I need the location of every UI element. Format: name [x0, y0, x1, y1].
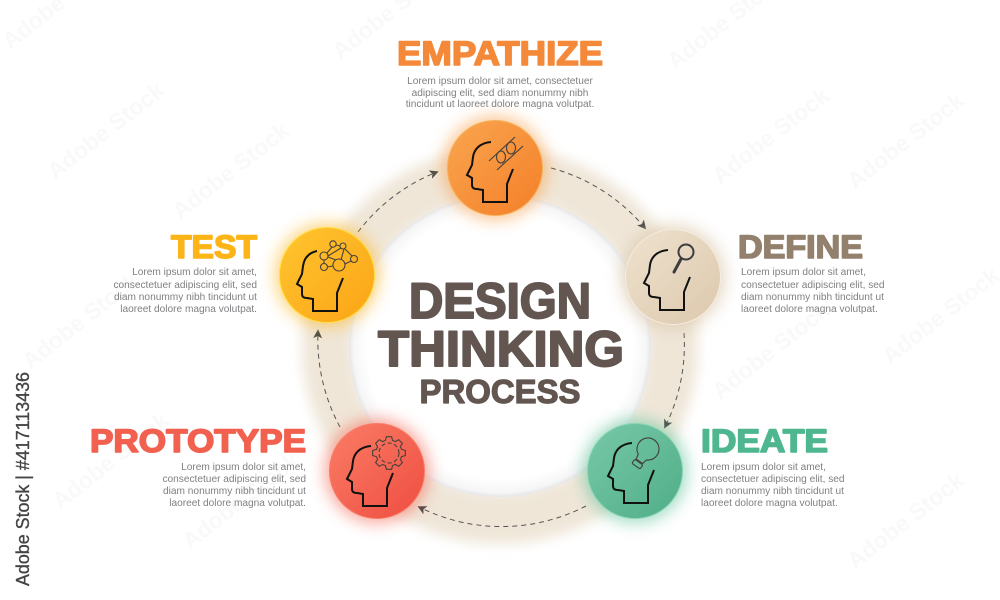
heading and text: test: TEST	[171, 229, 257, 265]
heading and text: empathize	[397, 35, 603, 110]
arrow: ideate to prototype	[419, 506, 586, 527]
arrow: empathize to define	[551, 168, 645, 228]
step: empathize icon	[443, 116, 547, 220]
watermark pattern: Adobe Stock	[707, 297, 834, 404]
step: test icon	[275, 223, 379, 327]
heading and text: prototype	[90, 423, 306, 509]
ring background	[328, 174, 672, 518]
watermark pattern: Adobe Stock	[167, 117, 294, 224]
watermark pattern: Adobe Stock	[842, 467, 969, 574]
center title	[378, 273, 624, 410]
heading and text: ideate: diam nonummy nibh tincidunt ut	[701, 486, 844, 497]
heading and text: test: laoreet dolore magna volutpat.	[120, 304, 257, 315]
heading and text: empathize: tincidunt ut laoreet dolore magna volutpat.	[406, 99, 594, 110]
heading and text: empathize: adipiscing elit, sed diam nonummy nibh	[412, 88, 588, 99]
heading and text: test: Lorem ipsum dolor sit amet,	[132, 267, 257, 278]
white centre disk	[349, 195, 651, 497]
heading and text: ideate: laoreet dolore magna volutpat.	[701, 498, 838, 509]
heading and text: prototype: PROTOTYPE	[90, 423, 306, 459]
watermark pattern: Adobe Stock	[707, 82, 834, 189]
watermark pattern: Adobe Stock	[47, 407, 174, 514]
heading and text: prototype: laoreet dolore magna volutpat.	[169, 498, 306, 509]
watermark pattern: Adobe Stock	[17, 267, 144, 374]
heading and text: define: Lorem ipsum dolor sit amet,	[741, 267, 866, 278]
center title: DESIGN	[409, 273, 591, 329]
heading and text: empathize: Lorem ipsum dolor sit amet, consectetuer	[407, 76, 593, 87]
step: prototype icon	[325, 419, 429, 523]
step: ideate icon	[583, 419, 687, 523]
heading and text: test	[113, 229, 257, 315]
heading and text: define: laoreet dolore magna volutpat.	[741, 304, 878, 315]
heading and text: ideate: IDEATE	[701, 423, 828, 459]
heading and text: prototype: consectetuer adipiscing elit, sed	[162, 474, 306, 485]
heading and text: empathize: EMPATHIZE	[397, 35, 603, 73]
arrow: test to empathize	[358, 172, 437, 232]
watermark pattern: Adobe Stock	[177, 447, 304, 554]
heading and text: prototype: diam nonummy nibh tincidunt ut	[163, 486, 306, 497]
heading and text: define: DEFINE	[738, 229, 863, 265]
heading and text: prototype: Lorem ipsum dolor sit amet,	[181, 462, 306, 473]
heading and text: ideate: consectetuer adipiscing elit, sed	[701, 474, 845, 485]
arrow: prototype to test	[318, 331, 340, 427]
heading and text: ideate: Lorem ipsum dolor sit amet,	[701, 462, 826, 473]
watermark pattern: Adobe Stock	[42, 77, 169, 184]
heading and text: define: diam nonummy nibh tincidunt ut	[741, 292, 884, 303]
center title: PROCESS	[420, 373, 580, 410]
heading and text: define	[738, 229, 885, 315]
arrow: define to ideate	[665, 333, 684, 427]
watermark pattern: Adobe Stock	[842, 87, 969, 194]
heading and text: define: consectetuer adipiscing elit, sed	[741, 280, 885, 291]
heading and text: test: diam nonummy nibh tincidunt ut	[114, 292, 257, 303]
center title: THINKING	[378, 321, 624, 377]
stock credit: Adobe Stock | #417113436	[12, 372, 33, 586]
heading and text: ideate	[701, 423, 845, 509]
step: define icon	[621, 225, 725, 329]
heading and text: test: consectetuer adipiscing elit, sed	[113, 280, 257, 291]
